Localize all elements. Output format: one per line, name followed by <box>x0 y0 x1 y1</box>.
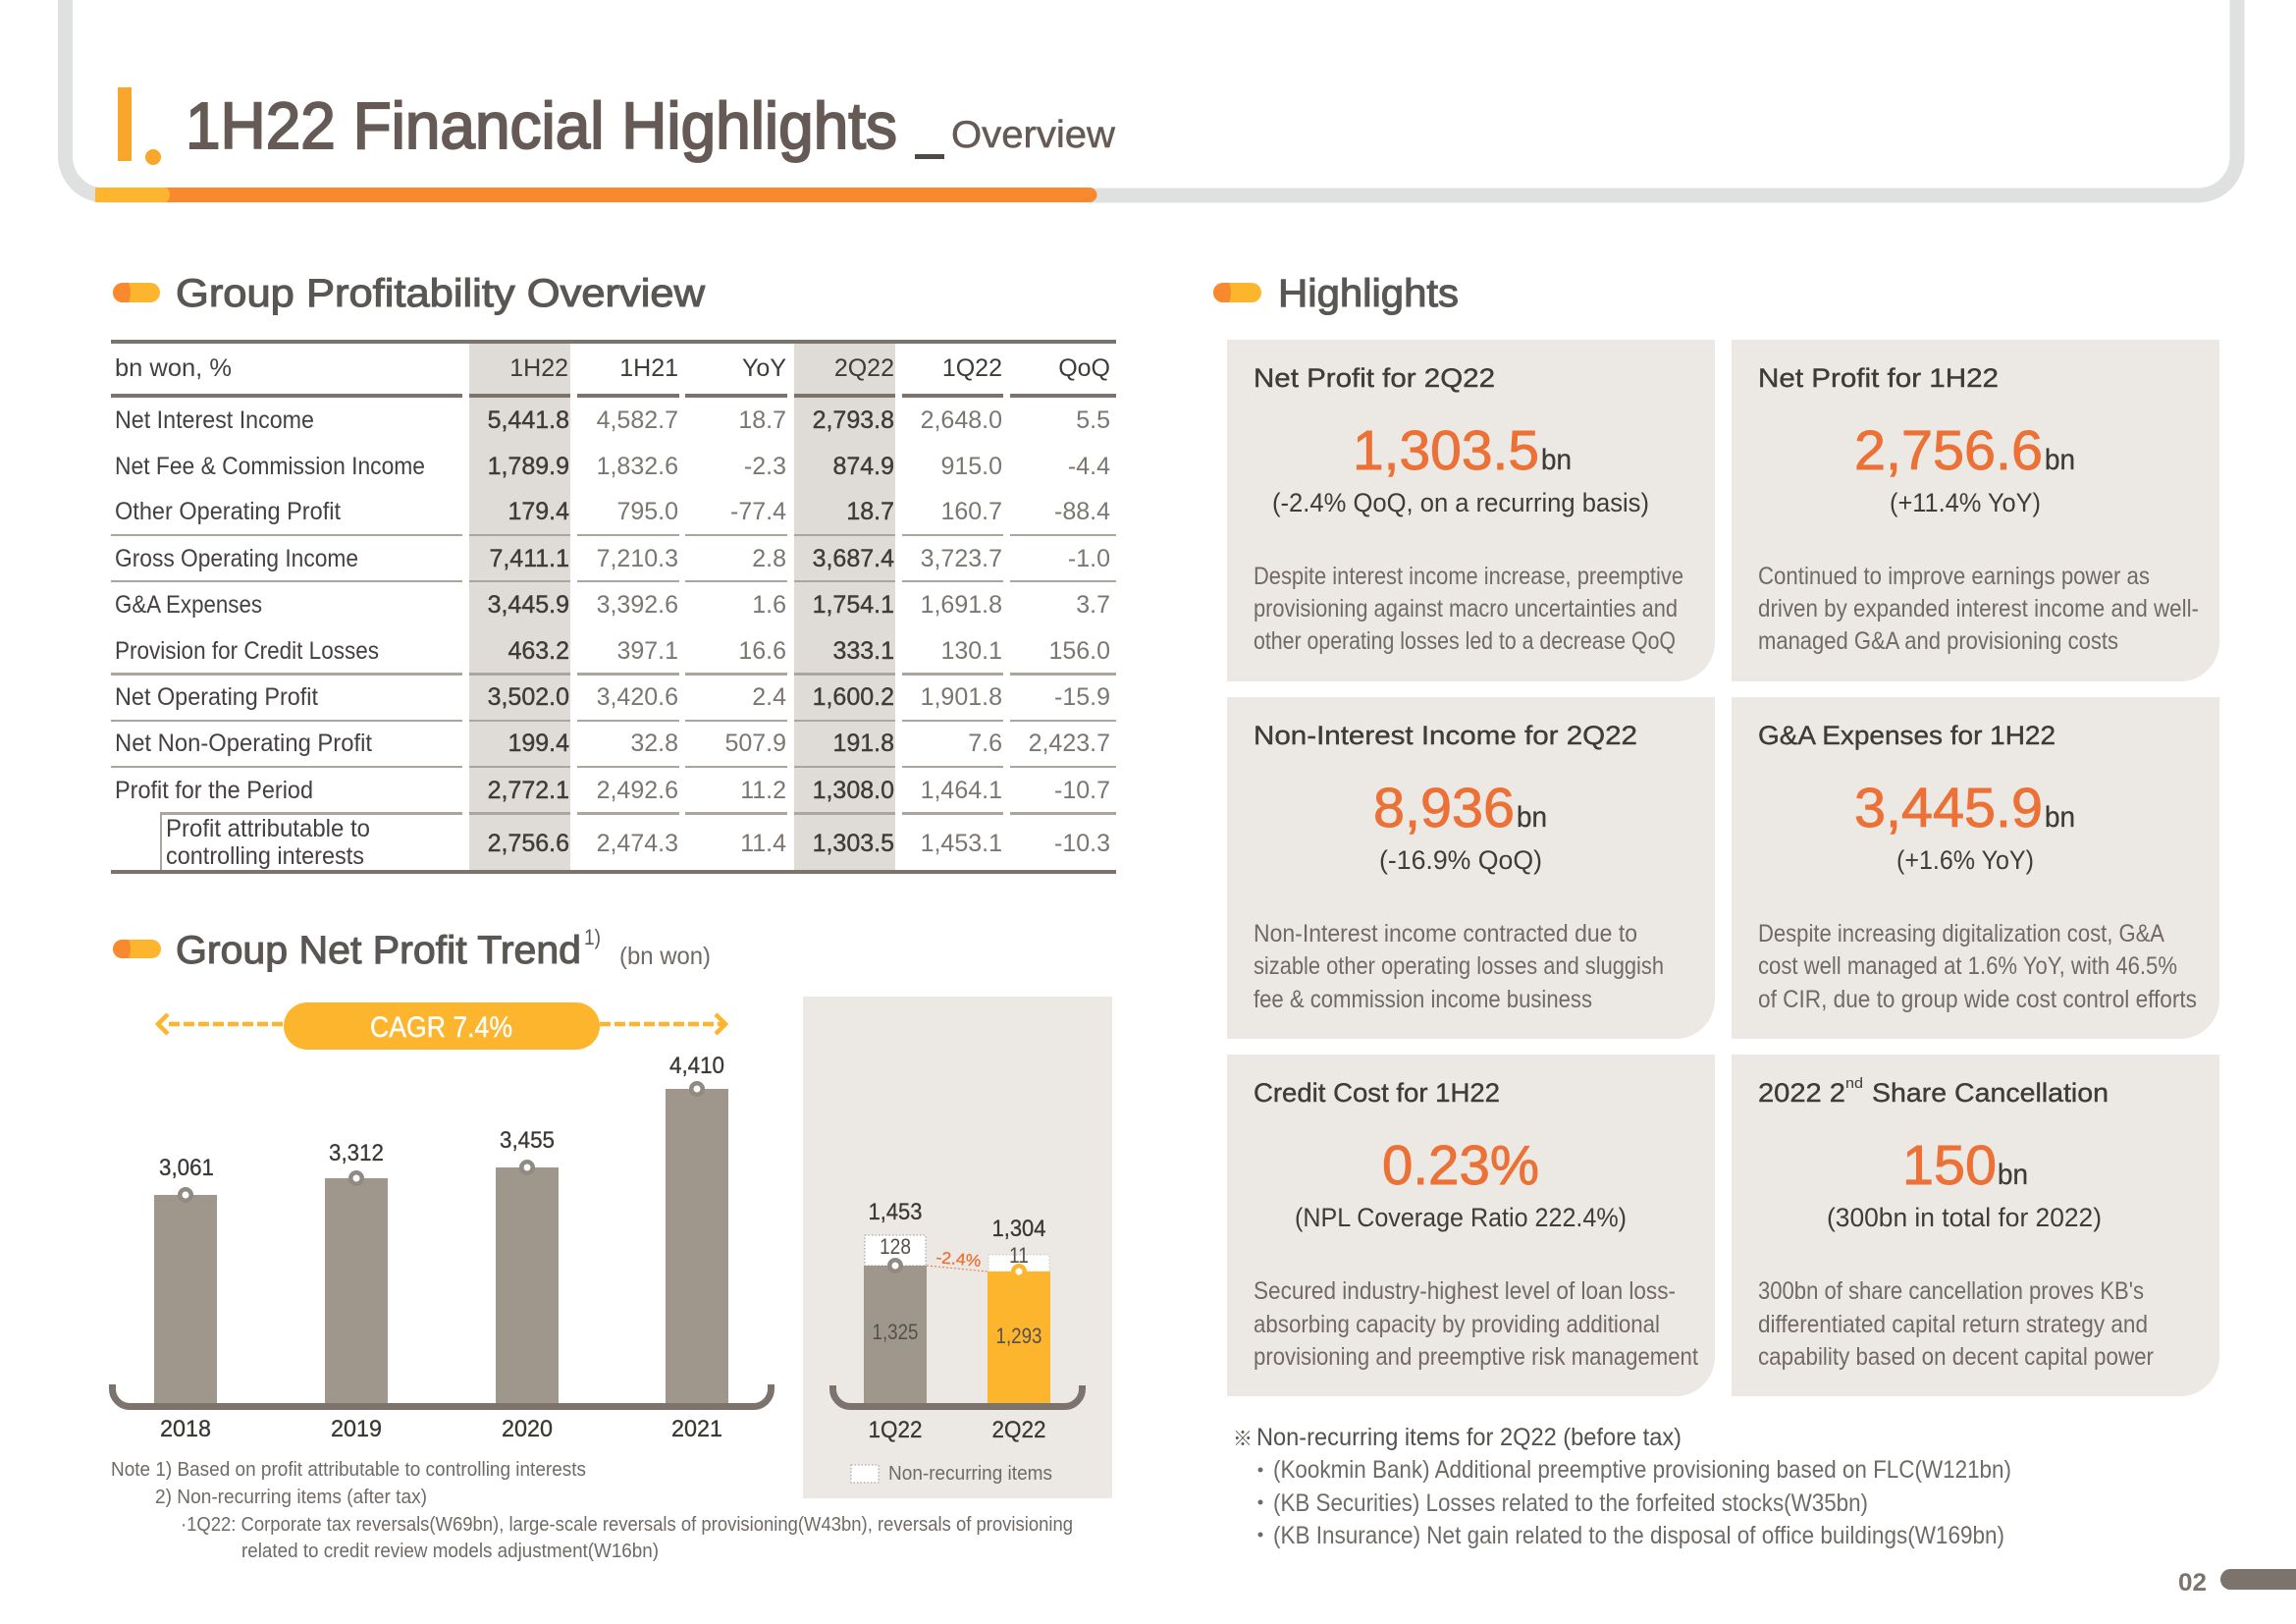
bar: 2020: 2020 <box>502 1416 553 1442</box>
card: non-interest income for 2Q22: Non-Interest Income for 2Q22 <box>1254 721 1637 750</box>
row: gross operating income: -1.0 <box>1068 545 1110 572</box>
row: net operating profit: 1,600.2 <box>813 683 894 711</box>
row: g&a expenses: 1.6 <box>752 591 786 619</box>
row: gross operating income: 2.8 <box>752 545 786 572</box>
card: 2022 2nd share cancellation: bn <box>1998 1159 2028 1191</box>
card: G&A expenses for 1H22: of CIR, due to group wide cost control efforts <box>1758 986 2197 1013</box>
bar: 1Q22: 1,453 <box>868 1199 923 1225</box>
card: G&A expenses for 1H22: bn <box>2045 801 2075 834</box>
row: g&a expenses <box>115 591 1110 619</box>
row: net non-operating profit: 191.8 <box>832 730 894 757</box>
bar chart: annual net profit <box>112 1053 772 1442</box>
bar: 1Q22: 128 <box>880 1234 911 1259</box>
row: provision for credit losses: 130.1 <box>940 637 1002 665</box>
row: provision for credit losses: 16.6 <box>738 637 786 665</box>
card: net profit for 2Q22: Despite interest income increase, preemptive <box>1254 563 1683 590</box>
table header row: 1H21 <box>619 354 678 382</box>
card: non-interest income for 2Q22: (-16.9% QoQ) <box>1379 845 1542 875</box>
row: net non-operating profit: 7.6 <box>968 730 1002 757</box>
bar: 2020: 3,455 <box>500 1127 555 1154</box>
table: group profitability <box>111 340 1116 874</box>
card: net profit for 1H22: Net Profit for 1H22 <box>1758 363 1999 393</box>
row: provision for credit losses: 333.1 <box>832 637 894 665</box>
row: profit attributable to controlling interests <box>166 815 1110 870</box>
row: net operating profit: 1,901.8 <box>921 683 1002 711</box>
card: 2022 2nd share cancellation: Share Cancellation <box>1872 1078 2109 1108</box>
card: non-interest income for 2Q22 <box>1227 697 1715 1039</box>
row: net non-operating profit: 2,423.7 <box>1029 730 1110 757</box>
card: net profit for 1H22: driven by expanded interest income and well- <box>1758 595 2199 623</box>
row: profit attributable to controlling interests: 11.4 <box>740 830 786 857</box>
callout: CAGR arrow: CAGR 7.4% <box>370 1011 512 1044</box>
row: profit attributable to controlling interests: 2,756.6 <box>488 830 569 857</box>
bar: 2021: 2021 <box>671 1416 722 1442</box>
footnote: non-recurring items: ※ <box>1233 1423 1253 1451</box>
row: g&a expenses: 1,691.8 <box>921 591 1002 619</box>
table header row: QoQ <box>1058 354 1110 382</box>
row: net fee and commission income: 915.0 <box>940 453 1002 480</box>
bar: 2Q22: 1,293 <box>995 1324 1042 1348</box>
row: net operating profit: 3,502.0 <box>488 683 569 711</box>
heading: group net profit trend: Group Net Profit Trend <box>176 929 581 972</box>
row: gross operating income: 7,210.3 <box>597 545 678 572</box>
card: net profit for 1H22: Continued to improve earnings power as <box>1758 563 2150 590</box>
row: profit attributable to controlling interests: 2,474.3 <box>597 830 678 857</box>
row: profit attributable to controlling interests: 1,453.1 <box>921 830 1002 857</box>
heading: group net profit trend <box>113 925 711 972</box>
heading: highlights: Highlights <box>1278 272 1459 315</box>
row: net fee and commission income: -4.4 <box>1068 453 1110 480</box>
footnote: non-recurring items: Non-recurring items for 2Q22 (before tax) <box>1256 1424 1682 1451</box>
card: 2022 2nd share cancellation: (300bn in total for 2022) <box>1827 1203 2102 1232</box>
bar chart: quarterly net profit <box>832 1199 1083 1485</box>
row: net non-operating profit: 507.9 <box>724 730 786 757</box>
card: net profit for 2Q22: bn <box>1541 444 1572 476</box>
row: other operating profit <box>115 498 1110 525</box>
title: Overview <box>951 114 1116 156</box>
bar: 2020 <box>496 1127 559 1442</box>
card: credit cost for 1H22: Secured industry-highest level of loan loss- <box>1254 1277 1676 1305</box>
row: profit for the period: 1,464.1 <box>921 777 1002 804</box>
row: net interest income: 18.7 <box>738 406 786 434</box>
bar: 1Q22: 1Q22 <box>868 1417 923 1443</box>
bar: 2Q22: 2Q22 <box>991 1417 1046 1443</box>
row: net operating profit: -15.9 <box>1054 683 1110 711</box>
bar: 2Q22: 11 <box>1009 1243 1029 1268</box>
card: G&A expenses for 1H22 <box>1732 697 2219 1039</box>
card: G&A expenses for 1H22: (+1.6% YoY) <box>1896 845 2034 875</box>
row: net non-operating profit: 199.4 <box>507 730 569 757</box>
row: profit for the period: 2,772.1 <box>488 777 569 804</box>
table header row: 2Q22 <box>834 354 894 382</box>
row: other operating profit: -77.4 <box>730 498 786 525</box>
card: 2022 2nd share cancellation: capability based on decent capital power <box>1758 1343 2154 1371</box>
card: net profit for 1H22: bn <box>2045 444 2075 476</box>
row: g&a expenses: 3,392.6 <box>597 591 678 619</box>
row: other operating profit: 18.7 <box>846 498 894 525</box>
card: 2022 2nd share cancellation <box>1732 1055 2219 1396</box>
table header row: bn won, % <box>115 354 232 382</box>
row: other operating profit: 179.4 <box>507 498 569 525</box>
notes: 2) Non-recurring items (after tax) <box>155 1487 427 1508</box>
header frame <box>65 0 2237 202</box>
bar: 2Q22: 1,304 <box>991 1216 1046 1242</box>
row: net interest income: 2,793.8 <box>813 406 894 434</box>
bar: 2018: 2018 <box>160 1416 211 1442</box>
row: net operating profit <box>115 683 1110 711</box>
row: net non-operating profit: Net Non-Operating Profit <box>115 730 372 757</box>
table header row: 1H22 <box>509 354 568 382</box>
row: provision for credit losses: 463.2 <box>507 637 569 665</box>
row: net operating profit: Net Operating Profit <box>115 683 318 711</box>
row: net fee and commission income: -2.3 <box>744 453 786 480</box>
card: non-interest income for 2Q22: bn <box>1517 801 1547 834</box>
card: 2022 2nd share cancellation: 300bn of share cancellation proves KB's <box>1758 1277 2144 1305</box>
row: provision for credit losses: 156.0 <box>1048 637 1110 665</box>
bar: 1Q22: 1,325 <box>872 1320 919 1344</box>
row: g&a expenses: 3,445.9 <box>488 591 569 619</box>
card: net profit for 2Q22: other operating losses led to a decrease QoQ <box>1254 627 1676 655</box>
card: net profit for 2Q22: Net Profit for 2Q22 <box>1254 363 1495 393</box>
row: net interest income: 4,582.7 <box>597 406 678 434</box>
bar: 2018: 3,061 <box>159 1155 214 1181</box>
row: net non-operating profit <box>115 730 1110 757</box>
footnote: non-recurring items: (KB Securities) Losses related to the forfeited stocks(W35bn) <box>1273 1489 1868 1517</box>
bar: 2018 <box>154 1155 217 1442</box>
bar: 1Q22 <box>864 1199 927 1443</box>
row: net interest income: 5.5 <box>1076 406 1110 434</box>
card: G&A expenses for 1H22: G&A Expenses for 1H22 <box>1758 721 2056 750</box>
footnote: non-recurring items: (Kookmin Bank) Additional preemptive provisioning based on FLC(W121bn) <box>1273 1456 2011 1484</box>
card: G&A expenses for 1H22: 3,445.9 <box>1854 777 2043 839</box>
row: net fee and commission income <box>115 453 1110 480</box>
card: 2022 2nd share cancellation: 2022 2 <box>1758 1078 1845 1108</box>
card: G&A expenses for 1H22: cost well managed at 1.6% YoY, with 46.5% <box>1758 952 2177 980</box>
row: net interest income: 5,441.8 <box>488 406 569 434</box>
card: net profit for 1H22: managed G&A and provisioning costs <box>1758 627 2118 655</box>
row: g&a expenses: 3.7 <box>1076 591 1110 619</box>
legend: non-recurring items: Non-recurring items <box>888 1463 1052 1485</box>
notes: related to credit review models adjustment(W16bn) <box>241 1541 659 1562</box>
row: profit for the period: 11.2 <box>740 777 786 804</box>
card: net profit for 1H22: (+11.4% YoY) <box>1890 488 2041 517</box>
row: net fee and commission income: 1,832.6 <box>597 453 678 480</box>
row: net fee and commission income: Net Fee & Commission Income <box>115 453 425 480</box>
row: g&a expenses: G&A Expenses <box>115 591 262 619</box>
notes: ·1Q22: Corporate tax reversals(W69bn), large-scale reversals of provisioning(W43bn), reversals of provisioning <box>181 1514 1073 1536</box>
row: other operating profit: -88.4 <box>1054 498 1110 525</box>
bar: 2019: 2019 <box>331 1416 382 1442</box>
panel: quarterly backdrop <box>803 997 1112 1498</box>
card: credit cost for 1H22: (NPL Coverage Ratio 222.4%) <box>1295 1203 1627 1232</box>
row: other operating profit: Other Operating Profit <box>115 498 341 525</box>
notes: Note 1) Based on profit attributable to controlling interests <box>111 1459 586 1481</box>
card: credit cost for 1H22: provisioning and preemptive risk management <box>1254 1343 1698 1371</box>
bar: 2019 <box>325 1140 388 1442</box>
row: gross operating income: 3,687.4 <box>813 545 894 572</box>
row: profit for the period: -10.7 <box>1054 777 1110 804</box>
heading: group net profit trend: 1) <box>584 925 601 949</box>
footnote: non-recurring items: (KB Insurance) Net gain related to the disposal of office buildings(W169bn) <box>1273 1522 2004 1549</box>
row: net operating profit: 2.4 <box>752 683 786 711</box>
title: 1H22 Financial Highlights <box>186 89 897 163</box>
row: profit for the period: Profit for the Period <box>115 777 313 804</box>
row: net interest income <box>115 406 1110 434</box>
row: profit attributable to controlling interests: Profit attributable to <box>166 815 370 842</box>
card: 2022 2nd share cancellation: nd <box>1845 1075 1863 1092</box>
bar: 2021 <box>666 1053 728 1442</box>
row: provision for credit losses <box>115 637 1110 665</box>
page number <box>2178 1569 2296 1597</box>
table header row: 1Q22 <box>942 354 1002 382</box>
card: credit cost for 1H22: Credit Cost for 1H22 <box>1254 1078 1500 1108</box>
table header row <box>115 354 1110 382</box>
card: credit cost for 1H22 <box>1227 1055 1715 1396</box>
card: non-interest income for 2Q22: 8,936 <box>1373 777 1515 839</box>
row: g&a expenses: 1,754.1 <box>813 591 894 619</box>
row: net fee and commission income: 1,789.9 <box>488 453 569 480</box>
row: profit for the period: 2,492.6 <box>597 777 678 804</box>
bar: 2Q22 <box>988 1216 1050 1443</box>
row: gross operating income: 3,723.7 <box>921 545 1002 572</box>
card: credit cost for 1H22: absorbing capacity by providing additional <box>1254 1311 1660 1338</box>
row: profit for the period: 1,308.0 <box>813 777 894 804</box>
card: net profit for 1H22 <box>1732 340 2219 681</box>
row: provision for credit losses: 397.1 <box>616 637 678 665</box>
card: net profit for 2Q22: (-2.4% QoQ, on a recurring basis) <box>1272 488 1649 517</box>
row: net non-operating profit: 32.8 <box>630 730 678 757</box>
table header row: YoY <box>742 354 786 382</box>
callout: CAGR arrow <box>158 1002 726 1050</box>
row: profit attributable to controlling interests: controlling interests <box>166 842 364 870</box>
card: non-interest income for 2Q22: fee & commission income business <box>1254 986 1592 1013</box>
row: profit for the period <box>115 777 1110 804</box>
card: G&A expenses for 1H22: Despite increasing digitalization cost, G&A <box>1758 920 2164 947</box>
card: non-interest income for 2Q22: Non-Interest income contracted due to <box>1254 920 1637 947</box>
heading: group net profit trend: (bn won) <box>619 943 711 970</box>
row: net fee and commission income: 874.9 <box>832 453 894 480</box>
row: provision for credit losses: Provision for Credit Losses <box>115 637 379 665</box>
row: gross operating income: Gross Operating Income <box>115 545 358 572</box>
row: gross operating income <box>115 545 1110 572</box>
card: 2022 2nd share cancellation: 150 <box>1902 1134 1997 1197</box>
change label: -2.4%: -2.4% <box>935 1248 982 1271</box>
row: net interest income: 2,648.0 <box>921 406 1002 434</box>
row: other operating profit: 795.0 <box>616 498 678 525</box>
card: net profit for 2Q22: provisioning against macro uncertainties and <box>1254 595 1678 623</box>
heading: group profitability overview: Group Profitability Overview <box>176 272 705 315</box>
row: profit attributable to controlling interests: 1,303.5 <box>813 830 894 857</box>
page number: 02 <box>2178 1569 2207 1597</box>
row: gross operating income: 7,411.1 <box>489 545 569 572</box>
row: other operating profit: 160.7 <box>940 498 1002 525</box>
card: credit cost for 1H22: 0.23% <box>1382 1134 1539 1197</box>
bar: 2021: 4,410 <box>669 1053 724 1079</box>
bar: 2019: 3,312 <box>329 1140 384 1166</box>
card: 2022 2nd share cancellation: differentiated capital return strategy and <box>1758 1311 2148 1338</box>
row: profit attributable to controlling interests: -10.3 <box>1054 830 1110 857</box>
card: net profit for 2Q22: 1,303.5 <box>1353 419 1539 482</box>
notes <box>111 1459 1073 1562</box>
row: net interest income: Net Interest Income <box>115 406 314 434</box>
card: net profit for 2Q22 <box>1227 340 1715 681</box>
card: non-interest income for 2Q22: sizable other operating losses and sluggish <box>1254 952 1664 980</box>
row: net operating profit: 3,420.6 <box>597 683 678 711</box>
card: net profit for 1H22: 2,756.6 <box>1854 419 2043 482</box>
footnote: non-recurring items <box>1233 1423 2011 1549</box>
